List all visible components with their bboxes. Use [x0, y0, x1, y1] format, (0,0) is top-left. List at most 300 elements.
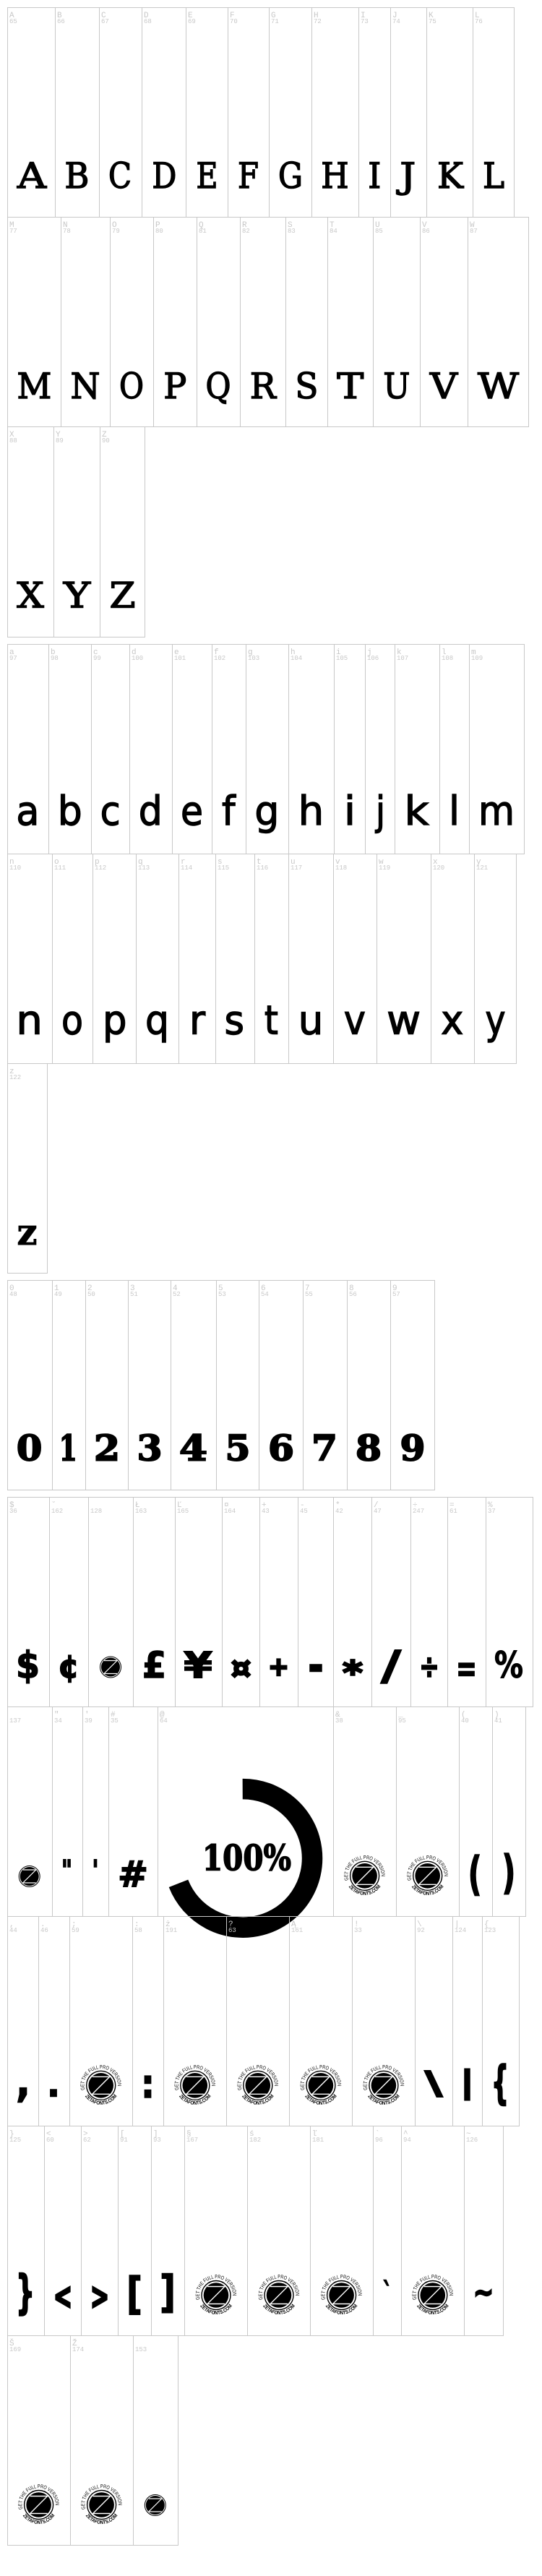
cell: X: X	[9, 431, 14, 439]
cell: G: G	[271, 12, 276, 20]
cell: slash: 47	[374, 1508, 382, 1515]
cell: 163: 163	[135, 1508, 147, 1515]
cell: pipe: |	[455, 1920, 460, 1929]
cell: s: s	[224, 997, 244, 1044]
cell: 8	[349, 1284, 382, 1469]
row: currency and math symbols	[9, 1501, 523, 1693]
cell: plus: +	[262, 1501, 267, 1510]
cell: k: 107	[397, 655, 408, 662]
cell: 9	[392, 1284, 425, 1469]
cell: K: K	[437, 155, 464, 197]
cell: L: L	[483, 155, 504, 197]
cell: U	[375, 221, 410, 407]
cell: B: 66	[57, 18, 65, 25]
cell: open brace: {	[491, 2056, 509, 2109]
cell: 169 badge: GET THE FULL PRO VERSION	[18, 2484, 59, 2510]
cell: 161 badge	[291, 1920, 341, 2105]
cell: E: E	[197, 155, 218, 197]
cell: plus: +	[268, 1652, 289, 1682]
cell: S: 83	[288, 228, 296, 235]
cell: u	[291, 858, 323, 1044]
cell: H	[314, 12, 349, 197]
cell: 4	[173, 1284, 207, 1469]
cell: 1: 1	[59, 1427, 77, 1469]
cell: J: 74	[392, 18, 400, 25]
cell: p: 112	[95, 864, 106, 872]
cell: double quote: "	[54, 1711, 59, 1720]
cell: semicolon badge: 59	[72, 1927, 79, 1934]
cell: open bracket: [	[120, 2130, 125, 2139]
cell: dollar: $	[9, 1501, 14, 1510]
cell: y: y	[476, 858, 481, 867]
cell: L	[475, 12, 504, 197]
cell: close paren: 41	[494, 1717, 502, 1725]
cell: z: z	[9, 1068, 14, 1076]
cell: semicolon badge: ;	[72, 1920, 77, 1929]
cell: open bracket: [	[126, 2268, 142, 2319]
cell: close bracket: ]	[153, 2130, 158, 2139]
cell: pipe: 124	[455, 1927, 466, 1934]
cell: equals: =	[449, 1501, 455, 1510]
row: uppercase A to L	[9, 12, 504, 197]
cell: Y: Y	[63, 575, 91, 617]
cell: S	[288, 221, 318, 407]
cell: d: 100	[132, 655, 143, 662]
cell: open brace	[484, 1920, 509, 2109]
cell: plus: 43	[262, 1508, 270, 1515]
cell: z: z	[17, 1211, 38, 1253]
cell: 7: 55	[305, 1291, 313, 1298]
cell: M	[9, 221, 51, 407]
cell: X: 88	[9, 437, 17, 445]
cell: period: .	[40, 1920, 46, 1929]
cell: 174 badge: 174	[72, 2346, 84, 2353]
cell: B	[57, 12, 89, 197]
cell: F: 70	[230, 18, 238, 25]
cell: I: I	[368, 155, 381, 197]
cell: 9: 9	[392, 1284, 397, 1293]
cell: O: 79	[112, 228, 120, 235]
cell: t: t	[264, 997, 278, 1044]
cell: V: V	[422, 221, 427, 230]
cell: colon	[134, 1920, 155, 2107]
row: punctuation and badges	[9, 1711, 515, 1900]
cell: less than: 60	[46, 2137, 54, 2144]
cell: A: 65	[9, 18, 17, 25]
cell: o: o	[54, 858, 59, 867]
cell: b: b	[58, 788, 82, 834]
cell: h: h	[298, 788, 324, 834]
cell: section badge: GET THE FULL PRO VERSION	[195, 2275, 237, 2300]
cell: J	[392, 12, 416, 197]
cell: period: 46	[40, 1927, 48, 1934]
cell: 191 badge: GET THE FULL PRO VERSION	[175, 2065, 215, 2090]
cell: 2: 2	[87, 1284, 93, 1293]
cell: m: 109	[471, 655, 483, 662]
cell: 191 badge: 191	[165, 1927, 177, 1934]
cell: 3	[130, 1284, 162, 1469]
cell: open brace: 123	[484, 1927, 496, 1934]
cell: t: 116	[257, 864, 268, 872]
cell: asterisk: *	[343, 1654, 363, 1692]
cell: x	[433, 858, 463, 1044]
cell: semicolon badge: ZETAFONTS.COM	[85, 2094, 117, 2105]
cell: L: L	[475, 12, 480, 20]
cell: u: u	[291, 858, 296, 867]
cell: 161 badge: GET THE FULL PRO VERSION	[301, 2065, 341, 2090]
cell: caret badge: 94	[403, 2137, 411, 2144]
cell: Q: Q	[199, 221, 204, 230]
cell: double quote	[54, 1711, 72, 1886]
cell: S: S	[288, 221, 293, 230]
cell: greater than: 62	[83, 2137, 91, 2144]
cell: P: P	[155, 221, 160, 230]
cell: close paren	[494, 1711, 515, 1899]
cell: S: S	[295, 366, 318, 407]
cell: G: 71	[271, 18, 279, 25]
cell: l: 108	[442, 655, 453, 662]
cell: ampersand badge: &	[335, 1711, 340, 1720]
cell: 2: 50	[87, 1291, 95, 1298]
cell: U: U	[375, 221, 380, 230]
cell: e: 101	[174, 655, 186, 662]
cell: R	[242, 221, 278, 407]
cell: m: m	[478, 788, 515, 834]
cell: j	[367, 648, 385, 834]
cell: single quote: 39	[85, 1717, 93, 1725]
cell: T: T	[330, 221, 335, 230]
cell: 182 badge: ZETAFONTS.COM	[263, 2304, 295, 2314]
cell: semicolon badge: GET THE FULL PRO VERSION	[80, 2065, 121, 2090]
cell: percent: %	[488, 1501, 493, 1510]
cell: q	[138, 858, 169, 1044]
cell: n: n	[9, 858, 14, 867]
cell: l: l	[449, 788, 460, 834]
cell: section badge	[186, 2130, 237, 2314]
cell: n	[9, 858, 43, 1044]
cell: 1: 49	[54, 1291, 62, 1298]
cell: open paren	[461, 1711, 481, 1900]
cell: 169 badge: 169	[9, 2346, 21, 2353]
cell: 162: 162	[51, 1508, 63, 1515]
cell: t	[257, 858, 278, 1044]
cell: 161 badge: 161	[291, 1927, 303, 1934]
cell: a: a	[9, 648, 14, 657]
cell: ampersand badge	[335, 1711, 385, 1895]
cell: 182 badge	[249, 2130, 299, 2314]
cell: M: M	[9, 221, 14, 230]
cell: comma: ,	[16, 2056, 30, 2107]
cell: period	[40, 1920, 60, 2105]
cell: q: 113	[138, 864, 150, 872]
cell: k	[397, 648, 429, 834]
cell: T	[330, 221, 364, 407]
cell: 1	[54, 1284, 77, 1469]
cell: slash	[374, 1501, 402, 1690]
cell: greater than	[83, 2130, 109, 2317]
cell: y: y	[486, 997, 506, 1044]
cell: f: 102	[214, 655, 225, 662]
cell: m: m	[471, 648, 476, 657]
cell: 163: Ł	[135, 1501, 140, 1510]
cell: 0: 0	[17, 1427, 42, 1469]
cell: J: J	[392, 12, 397, 20]
cell: j: j	[367, 648, 372, 657]
cell: N	[63, 221, 100, 407]
cell: grave: 96	[375, 2137, 383, 2144]
cell: tilde: ~	[473, 2276, 494, 2309]
cell: dollar: 36	[9, 1508, 17, 1515]
cell: P	[155, 221, 186, 407]
cell: backslash	[417, 1920, 443, 2102]
cell: question badge	[228, 1920, 279, 2105]
cell: e	[174, 648, 203, 834]
cell: n: n	[16, 997, 43, 1044]
cell: P: P	[163, 366, 186, 407]
cell: 162: ¢	[58, 1649, 79, 1686]
cell: close paren: )	[502, 1846, 515, 1899]
row: brackets and badges	[9, 2129, 494, 2319]
cell: 174 badge	[72, 2338, 122, 2524]
cell: minus	[300, 1501, 324, 1693]
cell: n: 110	[9, 864, 21, 872]
cell: backslash: \	[425, 2065, 443, 2102]
cell: 6: 6	[261, 1284, 266, 1293]
cell: x: x	[433, 858, 438, 867]
cell: c: c	[93, 648, 98, 657]
cell: equals: 61	[449, 1508, 457, 1515]
cell: 169 badge: Š	[9, 2338, 14, 2348]
cell: 162: ˘	[51, 1501, 56, 1510]
cell: small badge 153	[135, 2346, 165, 2515]
cell: W: 87	[470, 228, 478, 235]
cell: C	[101, 12, 132, 197]
cell: H: H	[314, 12, 319, 20]
cell: close bracket: 93	[153, 2137, 161, 2144]
cell: minus: -	[308, 1638, 324, 1693]
cell: t: t	[257, 858, 262, 867]
cell: 182 badge: 182	[249, 2137, 261, 2144]
cell: l	[442, 648, 460, 834]
cell: o: o	[61, 997, 83, 1044]
cell: i: i	[336, 648, 341, 657]
cell: h: h	[291, 648, 296, 657]
cell: underscore badge	[397, 1711, 448, 1895]
cell: asterisk: *	[335, 1501, 340, 1510]
cell: percent: 37	[488, 1508, 496, 1515]
cell: r: 114	[181, 864, 192, 872]
cell: B: B	[57, 12, 62, 20]
cell: greater than: >	[90, 2275, 109, 2317]
cell: q: q	[145, 997, 169, 1044]
cell: o	[54, 858, 83, 1044]
cell: H: 72	[314, 18, 322, 25]
cell: plus	[262, 1501, 289, 1682]
cell: colon: 58	[134, 1927, 142, 1934]
cell: B: B	[64, 155, 89, 197]
cell: N: 78	[63, 228, 71, 235]
cell: I: I	[361, 12, 366, 20]
cell: c: 99	[93, 655, 101, 662]
cell: D: D	[144, 12, 149, 20]
cell: comma: ,	[9, 1920, 14, 1929]
cell: 5	[218, 1284, 250, 1469]
row: final badges	[9, 2338, 166, 2524]
cell: a	[9, 648, 39, 834]
cell: 191 badge	[165, 1920, 215, 2105]
cell: divide: ÷	[413, 1501, 418, 1510]
cell: colon: :	[134, 1920, 139, 1929]
cell: small badge 153: 153	[135, 2346, 147, 2353]
cell: D: D	[152, 155, 176, 197]
cell: p	[95, 858, 127, 1044]
cell: M: M	[17, 366, 51, 407]
cell: 3: 3	[130, 1284, 135, 1293]
cell: less than	[46, 2130, 72, 2317]
cell: F: F	[230, 12, 235, 20]
cell: 174 badge: ZETAFONTS.COM	[85, 2514, 117, 2524]
cell: 161 badge: ZETAFONTS.COM	[305, 2094, 337, 2105]
cell: d: d	[132, 648, 137, 657]
cell: V: 86	[422, 228, 430, 235]
cell: E: 69	[188, 18, 196, 25]
cell: 164: ¤	[224, 1501, 229, 1510]
cell: y: 121	[476, 864, 488, 872]
cell: W: W	[470, 221, 475, 230]
cell: semicolon badge	[72, 1920, 121, 2105]
cell: 182 badge: GET THE FULL PRO VERSION	[259, 2275, 299, 2300]
cell: E	[188, 12, 218, 197]
cell: V	[422, 221, 459, 407]
cell: l: l	[442, 648, 447, 657]
cell: k: k	[397, 648, 402, 657]
cell: Y: 89	[56, 437, 64, 445]
cell: R: 82	[242, 228, 250, 235]
cell: 2	[87, 1284, 120, 1469]
cell: x: 120	[433, 864, 444, 872]
cell: backslash: \	[417, 1920, 422, 1929]
cell: backslash: 92	[417, 1927, 425, 1934]
cell: T: T	[337, 366, 364, 407]
cell: g: 103	[248, 655, 259, 662]
cell: small badge 137	[9, 1717, 40, 1886]
cell: caret badge: GET THE FULL PRO VERSION	[412, 2275, 454, 2300]
cell: N: N	[71, 366, 100, 407]
cell: comma: 44	[9, 1927, 17, 1934]
cell: grave: `	[383, 2277, 392, 2311]
cell: 163	[135, 1501, 166, 1686]
cell: asterisk: 42	[335, 1508, 343, 1515]
cell: divide: 247	[413, 1508, 424, 1515]
cell: 181 badge: 181	[312, 2137, 324, 2144]
cell: question badge: GET THE FULL PRO VERSION	[237, 2065, 279, 2090]
cell: close bracket	[153, 2130, 176, 2318]
cell: slash: /	[381, 1643, 402, 1690]
cell: K: 75	[429, 18, 436, 25]
cell: o: 111	[54, 864, 66, 872]
cell: z	[9, 1068, 38, 1253]
cell: w	[379, 858, 421, 1044]
cell: 9: 57	[392, 1291, 400, 1298]
cell: exclamation badge: !	[354, 1920, 359, 1929]
cell: comma	[9, 1920, 30, 2107]
cell: I: 73	[361, 18, 369, 25]
cell: divide: ÷	[419, 1647, 439, 1687]
cell: 162	[51, 1501, 79, 1686]
cell: 163: £	[142, 1644, 166, 1686]
cell: single quote: '	[85, 1711, 90, 1720]
cell: 182 badge: ś	[249, 2130, 254, 2139]
cell: C: 67	[101, 18, 109, 25]
cell: 165	[177, 1501, 212, 1686]
cell: percent: %	[494, 1644, 523, 1686]
cell: 0: 0	[9, 1284, 14, 1293]
cell: hash	[111, 1711, 148, 1896]
cell: close brace: }	[16, 2266, 35, 2319]
cell: at: 100%	[202, 1837, 291, 1879]
cell: 164	[224, 1501, 251, 1685]
cell: less than: <	[46, 2130, 51, 2139]
cell: caret badge: ZETAFONTS.COM	[416, 2304, 449, 2314]
cell: x: x	[441, 997, 463, 1044]
cell: divide	[413, 1501, 439, 1687]
cell: equals	[449, 1501, 477, 1691]
row: uppercase X to Z	[9, 431, 136, 617]
cell: 5: 5	[225, 1427, 250, 1469]
cell: g: g	[254, 788, 279, 834]
cell: r	[181, 858, 205, 1044]
cell: X: X	[17, 575, 44, 617]
cell: close brace: 125	[9, 2137, 21, 2144]
cell: F: F	[238, 155, 259, 197]
cell: X	[9, 431, 44, 617]
cell: f: f	[214, 648, 219, 657]
cell: b: b	[51, 648, 56, 657]
cell: O: O	[119, 366, 144, 407]
cell: R: R	[242, 221, 247, 230]
cell: f	[214, 648, 236, 834]
cell: D	[144, 12, 176, 197]
cell: c: c	[100, 788, 121, 834]
cell: underscore badge: _	[397, 1711, 403, 1720]
cell: k: k	[405, 788, 429, 834]
cell: 1: 1	[54, 1284, 59, 1293]
cell: minus: 45	[300, 1508, 308, 1515]
icon: progress ring	[178, 1789, 312, 1928]
cell: 165: 165	[177, 1508, 189, 1515]
cell: 7: 7	[305, 1284, 310, 1293]
cell: z: 122	[9, 1074, 21, 1081]
cell: Y	[56, 431, 91, 617]
cell: 6: 6	[268, 1427, 294, 1469]
cell: underscore badge: GET THE FULL PRO VERSION	[407, 1855, 448, 1881]
cell: E: E	[188, 12, 193, 20]
cell: D: 68	[144, 18, 152, 25]
cell: h	[291, 648, 324, 834]
cell: C: C	[108, 155, 132, 197]
cell: s: 115	[218, 864, 229, 872]
cell: j: j	[375, 788, 385, 834]
cell: r: r	[181, 858, 186, 867]
cell: 9: 9	[400, 1427, 425, 1469]
cell: hash: #	[118, 1854, 148, 1896]
cell: Z	[102, 431, 136, 617]
cell: 4: 4	[179, 1427, 207, 1469]
cell: m	[471, 648, 515, 834]
cell: i: 105	[336, 655, 348, 662]
cell: 7: 7	[311, 1427, 337, 1469]
cell: 4: 4	[173, 1284, 178, 1293]
